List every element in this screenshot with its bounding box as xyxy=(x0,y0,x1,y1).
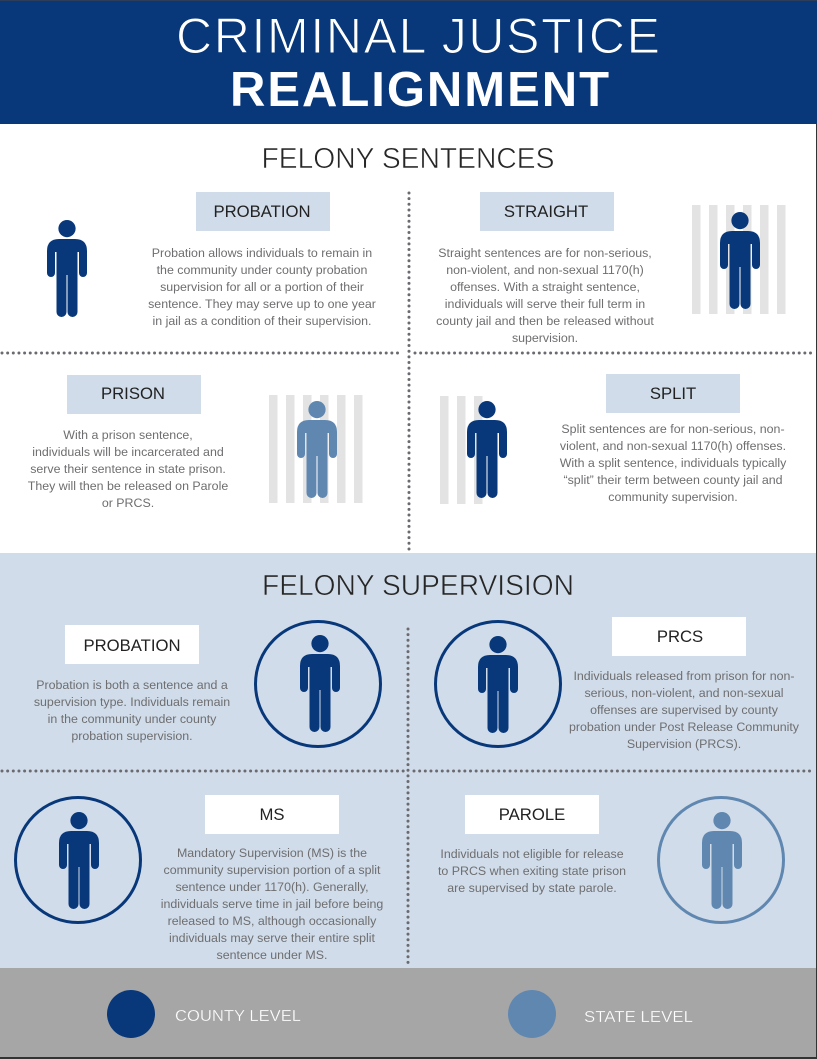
label: probation xyxy=(196,192,330,231)
label: split xyxy=(606,374,740,413)
label: straight xyxy=(480,192,614,231)
icon: state person xyxy=(297,401,337,498)
icon: county person in circle xyxy=(16,798,140,922)
text: split description: community supervision. xyxy=(608,490,738,504)
text: straight description: supervision. xyxy=(512,331,578,345)
text: split description xyxy=(560,422,787,504)
text: ms description: released to MS, although occasionally xyxy=(168,914,377,928)
dotted dividers: sentences xyxy=(2,193,813,549)
icon: county person in circle xyxy=(256,622,380,746)
label: ms xyxy=(205,795,339,834)
legend: county level: COUNTY LEVEL xyxy=(175,1008,301,1025)
text: ms description: sentence under MS. xyxy=(217,948,327,962)
text: prison description: serve their sentence in state prison. xyxy=(30,462,226,476)
text: ms description: Mandatory Supervision (MS) is the xyxy=(177,846,367,860)
text: prcs description: Supervision (PRCS). xyxy=(627,737,741,751)
text: split description: With a split sentence, individuals typically xyxy=(560,456,787,470)
title line one: CRIMINAL JUSTICE xyxy=(176,8,660,64)
label: straight: STRAIGHT xyxy=(504,202,588,221)
label: prcs: PRCS xyxy=(657,627,703,646)
heading: felony supervision: FELONY SUPERVISION xyxy=(262,570,574,602)
text: parole description: are supervised by state parole. xyxy=(447,881,617,895)
text: prcs description: offenses are supervised by county xyxy=(590,703,779,717)
text: straight description xyxy=(436,246,654,345)
text: prison description: or PRCS. xyxy=(102,496,154,510)
text: straight description: offenses. With a straight sentence, xyxy=(450,280,640,294)
icon: state person in circle xyxy=(658,798,784,922)
text: probation description: the community under county probation xyxy=(157,263,367,277)
label: parole: PAROLE xyxy=(499,805,565,824)
section background: felony supervision xyxy=(0,553,816,968)
text: split description: “split” their term between county jail and xyxy=(563,473,783,487)
text: prison description: With a prison sentence, xyxy=(63,428,193,442)
label: probation: PROBATION xyxy=(83,636,181,655)
text: probation supervision description: in the community under county xyxy=(48,712,217,726)
text: straight description: Straight sentences are for non-serious, xyxy=(438,246,652,260)
panel: prcs xyxy=(436,617,800,751)
text: probation description: sentence. They may serve up to one year xyxy=(148,297,376,311)
heading: felony sentences: FELONY SENTENCES xyxy=(262,143,554,175)
icon: jail bars xyxy=(440,396,482,504)
panel: parole xyxy=(438,795,784,922)
text: prcs description: probation under Post Release Community xyxy=(569,720,800,734)
label: probation: PROBATION xyxy=(213,202,311,221)
legend: county level xyxy=(107,990,301,1038)
legend: state level xyxy=(508,990,693,1038)
label: prison xyxy=(67,375,201,414)
panel: split sentence xyxy=(440,374,787,504)
title line two: REALIGNMENT xyxy=(230,63,609,117)
text: probation supervision description: Probation is both a sentence and a xyxy=(36,678,228,692)
legend band xyxy=(0,968,817,1059)
label: prison: PRISON xyxy=(101,384,165,403)
text: prison description: They will then be released on Parole xyxy=(28,479,228,493)
text: probation supervision description: probation supervision. xyxy=(71,729,193,743)
text: parole description: to PRCS when exiting state prison xyxy=(438,864,626,878)
text: probation description: in jail as a condition of their supervision. xyxy=(152,314,372,328)
text: straight description: county jail and then be released without xyxy=(436,314,654,328)
text: straight description: individuals will serve their full term in xyxy=(445,297,645,311)
text: split description: violent, and non-sexual 1170(h) offenses. xyxy=(560,439,786,453)
panel: straight sentence xyxy=(436,192,786,345)
text: probation supervision description: supervision type. Individuals remain xyxy=(34,695,230,709)
text: probation description: Probation allows individuals to remain in xyxy=(152,246,372,260)
label: split: SPLIT xyxy=(650,384,696,403)
text: ms description xyxy=(161,846,383,962)
icon: county person xyxy=(467,401,507,498)
text: probation description: supervision for all or a portion of their xyxy=(160,280,364,294)
panel: probation supervision xyxy=(34,622,380,746)
label: probation xyxy=(65,625,199,664)
panel: probation sentence xyxy=(47,192,376,328)
text: parole description: Individuals not eligible for release xyxy=(440,847,624,861)
text: probation description xyxy=(148,246,376,328)
legend: state level: STATE LEVEL xyxy=(584,1009,693,1026)
icon: county person in circle xyxy=(436,622,560,746)
icon: county person xyxy=(720,212,760,309)
text: ms description: community supervision portion of a split xyxy=(164,863,381,877)
dotted dividers: supervision xyxy=(2,629,815,964)
text: ms description: sentence under 1170(h). Generally, xyxy=(175,880,369,894)
text: straight description: non-violent, and non-sexual 1170(h) xyxy=(446,263,644,277)
icon: jail bars xyxy=(692,205,786,314)
text: prcs description: serious, non-violent, and non-sexual xyxy=(584,686,784,700)
text: split description: Split sentences are for non-serious, non- xyxy=(561,422,785,436)
text: probation supervision description xyxy=(34,678,230,743)
header banner xyxy=(0,0,817,124)
label: prcs xyxy=(612,617,746,656)
text: parole description xyxy=(438,847,626,895)
icon: jail bars xyxy=(269,395,362,503)
label: parole xyxy=(465,795,599,834)
icon: county person xyxy=(47,220,87,317)
text: prison description: individuals will be incarcerated and xyxy=(32,445,224,459)
panel: prison sentence xyxy=(28,375,362,510)
label: ms: MS xyxy=(259,805,285,824)
text: ms description: individuals serve time in jail before being xyxy=(161,897,383,911)
text: prison description xyxy=(28,428,228,510)
text: prcs description xyxy=(569,669,800,751)
panel: mandatory supervision xyxy=(16,795,383,962)
text: prcs description: Individuals released from prison for non- xyxy=(573,669,795,683)
text: ms description: individuals may serve their entire split xyxy=(169,931,376,945)
